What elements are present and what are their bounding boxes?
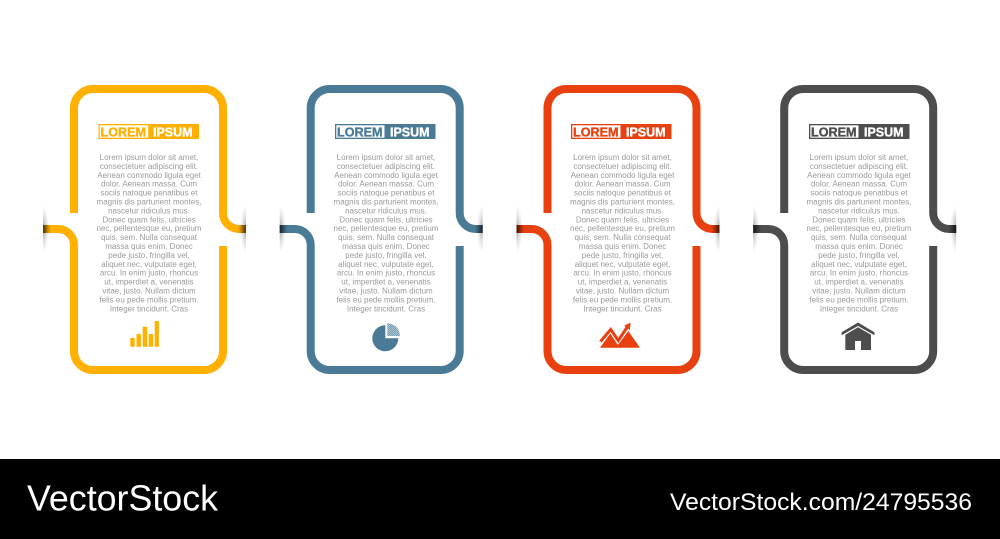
body text: quis, sem. Nulla consequat: [574, 233, 671, 242]
heading: LOREM IPSUM: [335, 124, 436, 140]
body text: aliquet nec, vulputate eget,: [575, 260, 670, 269]
icon: mountain trend arrow: [600, 322, 640, 348]
body text: massa quis enim. Donec: [342, 242, 430, 251]
body text: sociis natoque penatibus et: [811, 189, 908, 198]
body text: Integer tincidunt. Cras: [347, 304, 425, 313]
footer image id: VectorStock.com/24795536: [670, 489, 972, 516]
body text: ut, imperdiet a, venenatis: [814, 278, 904, 287]
body text: consectetuer adipiscing elit.: [573, 162, 672, 171]
body text: Donec quam felis, ultricies: [102, 215, 196, 224]
heading: LOREM IPSUM: [98, 124, 199, 140]
body text: felis eu pede mollis pretium.: [573, 295, 672, 304]
frame: yellow connector outline: [43, 89, 246, 370]
panel: step 2 (blue): [280, 89, 483, 370]
body text: consectetuer adipiscing elit.: [810, 162, 908, 171]
body text: vitae, justo. Nullam dictum: [102, 286, 196, 296]
footer bar: [0, 459, 1000, 539]
body text: Lorem ipsum dolor sit amet,: [100, 153, 198, 162]
body text: arcu. In enim justo, rhoncus: [810, 269, 908, 278]
icon: house: [842, 322, 874, 350]
body text: Integer tincidunt. Cras: [110, 304, 188, 313]
frame: red connector outline: [516, 89, 720, 370]
body text: Aenean commodo ligula eget: [334, 171, 439, 180]
body text: consectetuer adipiscing elit.: [100, 162, 198, 171]
body text: dolor. Aenean massa. Cum: [338, 180, 434, 189]
body text: pede justo, fringilla vel,: [582, 251, 663, 260]
footer logo text: VectorStock: [27, 478, 219, 518]
body text: Donec quam felis, ultricies: [576, 215, 669, 224]
body text: nascetur ridiculus mus.: [582, 206, 663, 215]
icon: bar chart: [130, 321, 159, 347]
body text: nascetur ridiculus mus.: [818, 206, 900, 215]
body text: ut, imperdiet a, venenatis: [104, 278, 194, 287]
heading: LOREM IPSUM: IPSUM: [153, 124, 192, 140]
body text: aliquet nec, vulputate eget,: [101, 260, 197, 269]
body text: nec, pellentesque eu, pretium: [334, 224, 439, 233]
body text: pede justo, fringilla vel,: [818, 251, 900, 260]
body text: arcu. In enim justo, rhoncus: [573, 269, 672, 278]
body text: Donec quam felis, ultricies: [812, 215, 906, 224]
body text: sociis natoque penatibus et: [574, 189, 672, 198]
body text: consectetuer adipiscing elit.: [337, 162, 435, 171]
heading: LOREM IPSUM: LOREM: [337, 124, 382, 140]
body text: sociis natoque penatibus et: [101, 189, 198, 198]
heading: LOREM IPSUM: LOREM: [100, 124, 146, 140]
body text: vitae, justo. Nullam dictum: [576, 286, 670, 296]
heading: LOREM IPSUM: IPSUM: [864, 124, 904, 140]
body text: dolor. Aenean massa. Cum: [811, 180, 907, 189]
panel: step 4 (dark grey): [753, 89, 956, 370]
heading: LOREM IPSUM: [571, 124, 672, 140]
body text: nascetur ridiculus mus.: [108, 206, 190, 215]
body text: sociis natoque penatibus et: [338, 189, 435, 198]
body text: magnis dis parturient montes,: [97, 198, 201, 206]
body text: nec, pellentesque eu, pretium: [97, 224, 202, 233]
connector shadows: [516, 205, 720, 253]
body text: Aenean commodo ligula eget: [571, 171, 675, 180]
body text: Integer tincidunt. Cras: [583, 304, 662, 313]
frame: blue connector outline: [280, 89, 483, 370]
panel: step 1 (yellow): [43, 89, 246, 370]
body text: aliquet nec, vulputate eget,: [338, 260, 434, 269]
body text: pede justo, fringilla vel,: [108, 251, 190, 260]
icon: pie chart: [372, 323, 400, 351]
body text: dolor. Aenean massa. Cum: [574, 180, 671, 189]
body text: vitae, justo. Nullam dictum: [339, 286, 433, 296]
heading: LOREM IPSUM: LOREM: [573, 124, 618, 140]
body text: aliquet nec, vulputate eget,: [811, 260, 907, 269]
heading: LOREM IPSUM: IPSUM: [390, 124, 430, 140]
body text: ut, imperdiet a, venenatis: [341, 278, 431, 287]
body text: Lorem ipsum dolor sit amet,: [810, 153, 908, 162]
body text: Lorem ipsum dolor sit amet,: [337, 153, 435, 162]
body text: massa quis enim. Donec: [105, 242, 193, 251]
body text: quis, sem. Nulla consequat: [101, 233, 198, 242]
heading: LOREM IPSUM: [809, 124, 910, 140]
body text: felis eu pede mollis pretium.: [336, 295, 436, 304]
body text: felis eu pede mollis pretium.: [99, 295, 199, 304]
frame: grey connector outline: [753, 89, 956, 370]
body text: massa quis enim. Donec: [579, 242, 666, 251]
connector shadows: [43, 205, 246, 253]
body text: magnis dis parturient montes,: [807, 198, 911, 206]
body text: Lorem ipsum dolor sit amet,: [573, 153, 672, 162]
body text: nec, pellentesque eu, pretium: [570, 224, 675, 233]
body text: Donec quam felis, ultricies: [339, 215, 433, 224]
body text: Aenean commodo ligula eget: [97, 171, 202, 180]
body text: arcu. In enim justo, rhoncus: [100, 269, 198, 278]
body text: vitae, justo. Nullam dictum: [812, 286, 906, 296]
body text: magnis dis parturient montes,: [334, 198, 438, 206]
connector shadows: [280, 205, 483, 253]
body text: pede justo, fringilla vel,: [345, 251, 427, 260]
body text: felis eu pede mollis pretium.: [809, 295, 909, 304]
heading: LOREM IPSUM: IPSUM: [626, 124, 666, 140]
body text: quis, sem. Nulla consequat: [338, 233, 435, 242]
body text: dolor. Aenean massa. Cum: [101, 180, 197, 189]
connector shadows: [753, 205, 956, 253]
body text: nascetur ridiculus mus.: [345, 206, 427, 215]
body text: quis, sem. Nulla consequat: [811, 233, 908, 242]
body text: nec, pellentesque eu, pretium: [807, 224, 912, 233]
body text: magnis dis parturient montes,: [570, 198, 675, 206]
body text: arcu. In enim justo, rhoncus: [337, 269, 435, 278]
heading: LOREM IPSUM: LOREM: [811, 124, 857, 140]
body text: Aenean commodo ligula eget: [807, 171, 912, 180]
panel: step 3 (red): [516, 89, 720, 370]
body text: Integer tincidunt. Cras: [820, 304, 898, 313]
body text: ut, imperdiet a, venenatis: [578, 278, 667, 287]
body text: massa quis enim. Donec: [815, 242, 903, 251]
